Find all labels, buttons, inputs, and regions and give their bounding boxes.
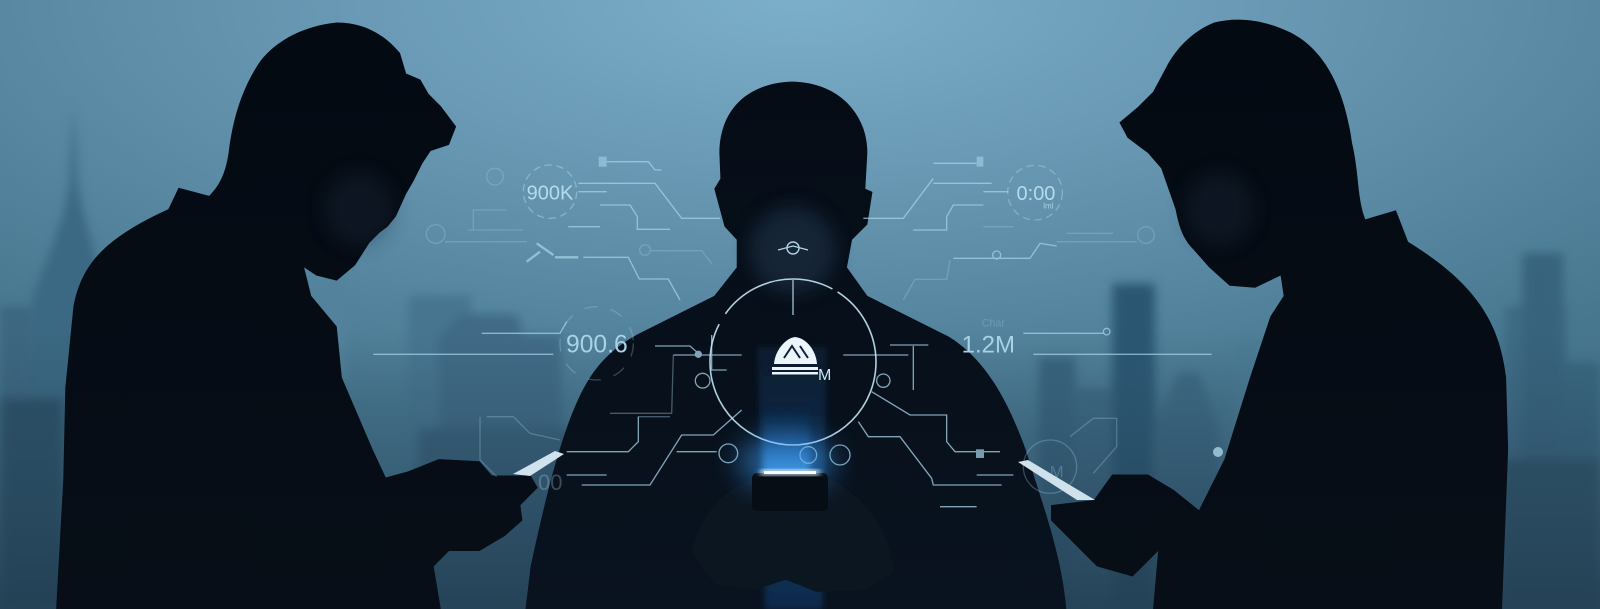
jacket circuit lines, right (800, 345, 1013, 507)
faint right decorations (903, 227, 1154, 493)
0:00 dial: 0:00 (1017, 183, 1055, 205)
figure: right man (1051, 20, 1508, 609)
upper right circuit lines (863, 157, 1057, 259)
data overlay: large central ring (710, 242, 876, 445)
small glowing dot beside right man (1213, 447, 1223, 457)
faint digits near left phone: 00 (538, 470, 562, 495)
centre man: lit face (750, 207, 836, 293)
faint right decorations: Char (982, 318, 1005, 330)
centre phone with glow (738, 436, 834, 511)
jacket circuit lines, left (567, 335, 742, 485)
1.2M label and leader lines (962, 328, 1212, 359)
figure: centre man (526, 82, 1066, 609)
icon: cloche with M label: M (818, 367, 831, 384)
faint left decorations (426, 168, 712, 477)
data overlay: left lines and 900K and 900.6 labels (373, 157, 742, 485)
centre man: hands (692, 480, 894, 592)
900.6 label and leader lines: 900.6 (566, 332, 628, 359)
900K dial: 900K (527, 182, 574, 204)
background: dark haze at the bottom (0, 330, 1600, 609)
0:00 dial (1008, 165, 1062, 220)
900.6 label and leader lines (373, 322, 628, 359)
icon: cloche with M label (772, 337, 831, 384)
900K dial (523, 165, 577, 218)
upper left circuit lines (527, 157, 720, 300)
centre man: light beam from phone (763, 403, 810, 480)
0:00 dial: lml (1043, 202, 1054, 211)
centre man: shirt (757, 347, 827, 609)
data overlay: right lines and 0:00 and 1.2M labels (800, 157, 1212, 507)
figure: left man (56, 22, 538, 609)
left man's phone (513, 451, 564, 476)
1.2M label and leader lines: 1.2M (962, 332, 1015, 359)
right man's phone (1018, 460, 1095, 500)
faint right decorations: M (1050, 462, 1064, 481)
